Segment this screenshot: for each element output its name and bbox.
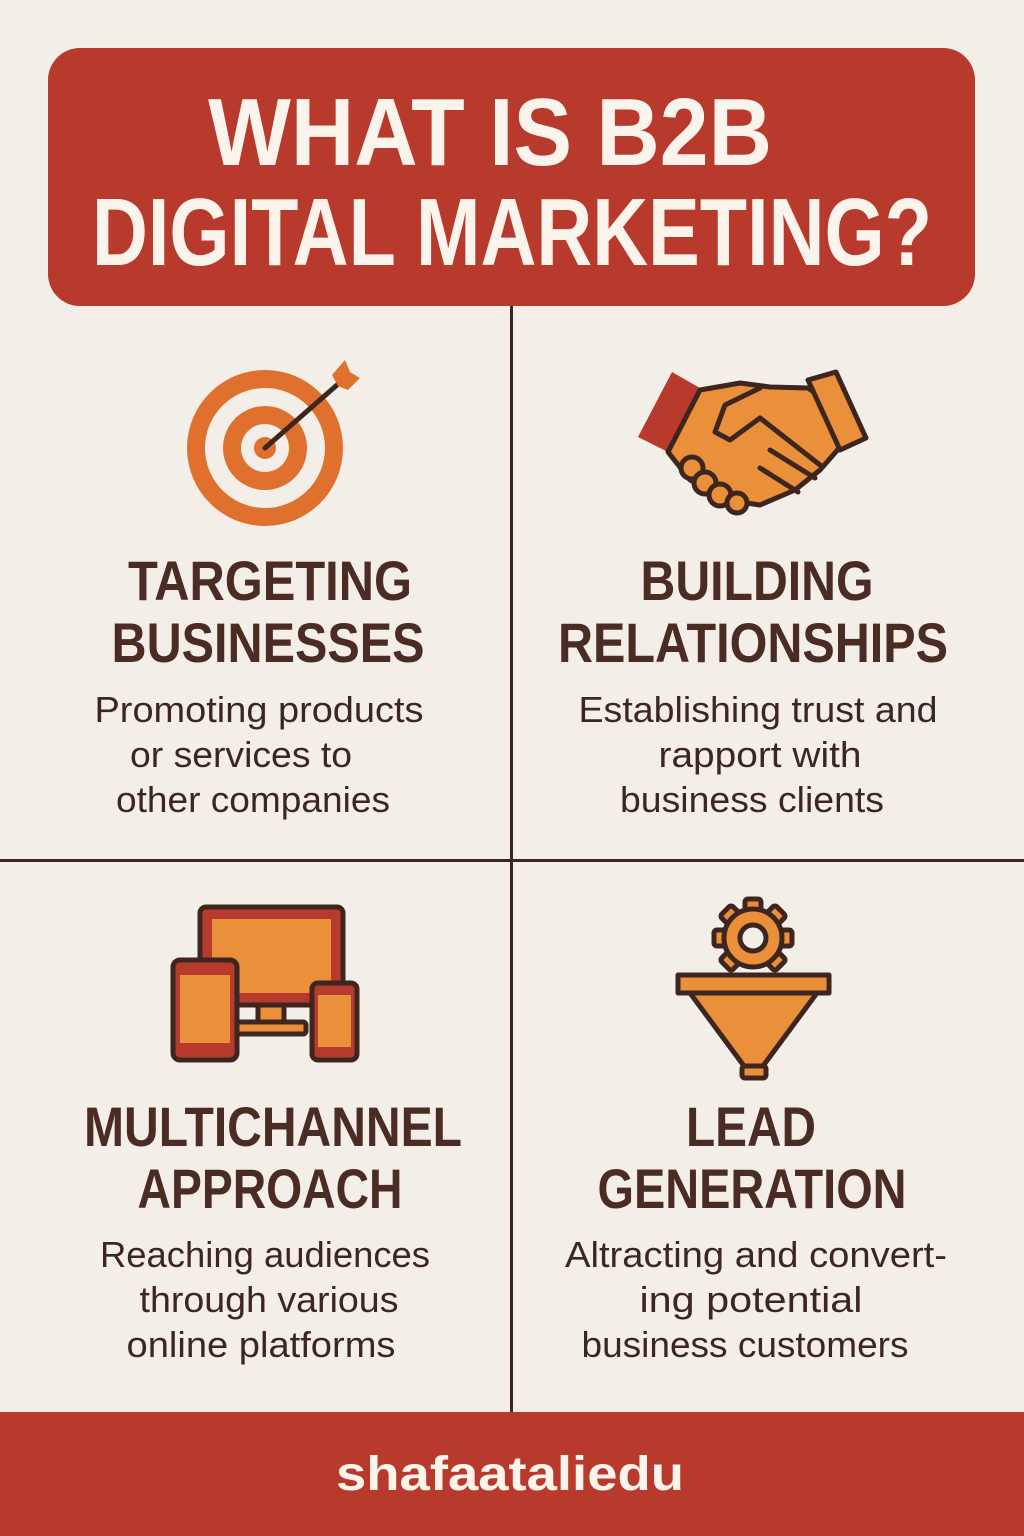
panel: multichannel approach: through various: [140, 1279, 398, 1320]
icon: devices: [173, 907, 357, 1060]
title banner: [48, 48, 975, 306]
panel: building relationships: BUILDING: [640, 549, 874, 612]
panel: multichannel approach: online platforms: [126, 1324, 396, 1365]
panel: building relationships: Establishing trust and: [578, 689, 938, 730]
title banner: WHAT IS B2B: [208, 79, 772, 186]
panel: lead generation: business customers: [582, 1324, 908, 1365]
panel: lead generation: ing potential: [640, 1279, 862, 1320]
panel: targeting businesses: other companies: [116, 779, 390, 820]
panel: targeting businesses: or services to: [130, 734, 352, 775]
panel: building relationships: business clients: [620, 779, 884, 820]
footer: [0, 1412, 1024, 1536]
panel: targeting businesses: [94, 360, 424, 820]
footer: shafaataliedu: [336, 1448, 684, 1501]
panel: multichannel approach: [84, 907, 462, 1365]
panel: targeting businesses: BUSINESSES: [112, 611, 424, 674]
icon: target: [187, 360, 360, 526]
panel: targeting businesses: TARGETING: [128, 549, 412, 612]
panel: multichannel approach: Reaching audiences: [100, 1234, 430, 1275]
icon: handshake: [638, 372, 866, 513]
panel: building relationships: [558, 372, 948, 820]
panel: lead generation: GENERATION: [598, 1157, 906, 1220]
panel: building relationships: RELATIONSHIPS: [558, 611, 948, 674]
panel: multichannel approach: MULTICHANNEL: [84, 1095, 462, 1158]
panel: building relationships: rapport with: [658, 734, 862, 775]
panel: multichannel approach: APPROACH: [138, 1157, 402, 1220]
panel: targeting businesses: Promoting products: [94, 689, 424, 730]
panel: lead generation: Altracting and convert-: [565, 1234, 947, 1275]
icon: funnel with gear: [678, 899, 829, 1078]
panel: lead generation: LEAD: [686, 1095, 816, 1158]
panel: lead generation: [565, 899, 947, 1365]
